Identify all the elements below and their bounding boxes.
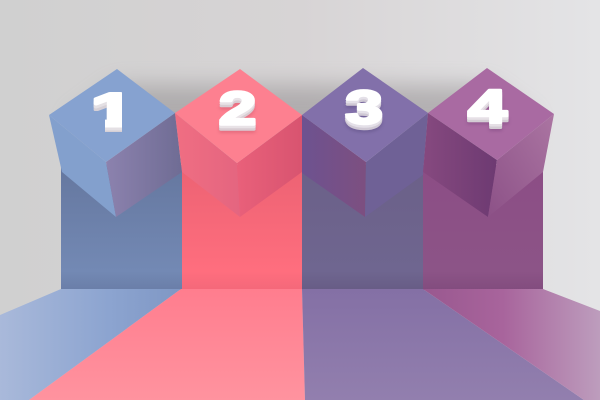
number 4: 4: [468, 85, 507, 138]
cube 2: [175, 69, 302, 217]
number 1: 1: [91, 84, 135, 136]
number 4: 4: [468, 80, 507, 133]
number 2: 2: [219, 88, 256, 140]
cube 3: [302, 68, 428, 217]
cube 4: [423, 68, 554, 217]
number 1: [94, 92, 122, 132]
wall colour strips: [61, 165, 543, 290]
number 1: 1: [91, 90, 135, 142]
number 3: 3: [345, 89, 383, 141]
number 2: 2: [219, 83, 256, 135]
number 4: 4: [468, 88, 507, 140]
number 3: 3: [345, 87, 383, 139]
cube 1: [49, 69, 182, 217]
number 1: 1: [91, 87, 135, 139]
number 3: 3: [345, 82, 383, 134]
number 2: 2: [219, 90, 256, 142]
number 2: 2: [219, 85, 256, 137]
number 4: 4: [468, 83, 507, 135]
floor colour strips: [0, 289, 600, 400]
number 3: 3: [345, 84, 383, 136]
